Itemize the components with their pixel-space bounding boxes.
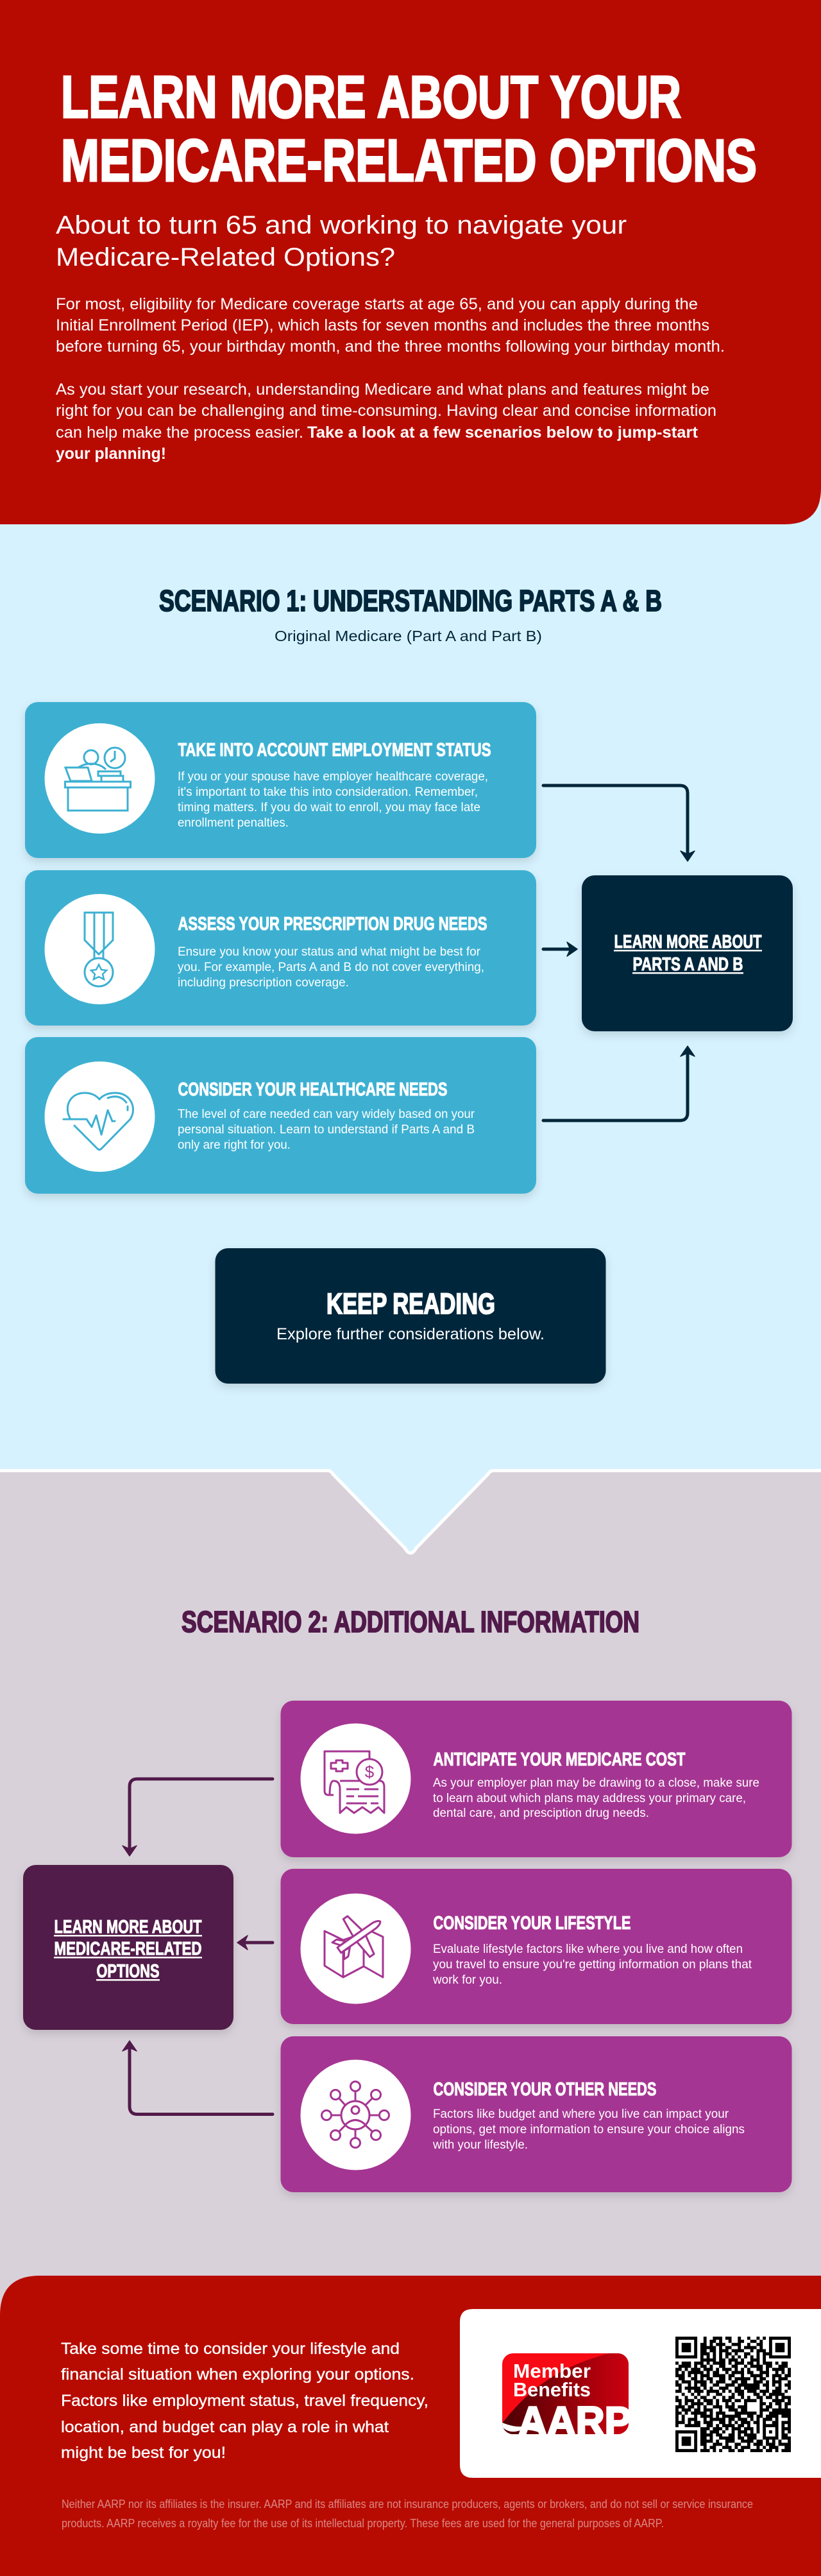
- card text: with your lifestyle.: [432, 2138, 528, 2152]
- intro paragraph 2: As you start your research, understanding Medicare and what plans and features might be: [56, 381, 709, 399]
- card text: personal situation. Learn to understand if Parts A and B: [178, 1122, 475, 1137]
- intro paragraph 1: Initial Enrollment Period (IEP), which lasts for seven months and includes the three months: [56, 316, 709, 334]
- callout: learn more about parts A and B: LEARN MORE ABOUT: [614, 932, 762, 952]
- card title: CONSIDER YOUR OTHER NEEDS: [434, 2079, 657, 2100]
- card: employment status: [25, 702, 536, 858]
- card text: Factors like budget and where you live can impact your: [433, 2107, 729, 2121]
- card text: Ensure you know your status and what might be best for: [178, 945, 480, 959]
- subtitle: About to turn 65 and working to navigate your: [56, 211, 627, 239]
- intro paragraph 2: can help make the process easier.: [56, 424, 303, 442]
- disclaimer: [62, 2497, 753, 2530]
- callout: learn more about medicare-related options: [23, 1865, 233, 2030]
- logo: AARP member benefits: [502, 2353, 629, 2434]
- card text: [178, 945, 484, 990]
- scenario 1 heading: SCENARIO 1: UNDERSTANDING PARTS A & B: [159, 584, 662, 617]
- callout: keep reading: KEEP READING: [326, 1287, 495, 1320]
- icon: map and plane: [325, 1903, 393, 1977]
- callout: learn more about parts A and B: [582, 875, 793, 1031]
- panel: scenario 1: [25, 584, 793, 1384]
- icon: heart: [63, 1093, 133, 1150]
- callout: keep reading: Explore further considerations below.: [276, 1325, 545, 1343]
- intro paragraph 1: For most, eligibility for Medicare coverage starts at age 65, and you can apply during the: [56, 295, 698, 313]
- card: healthcare needs: [25, 1037, 536, 1194]
- icon: medical bill: $: [365, 1762, 375, 1782]
- logo: AARP member benefits: Benefits: [513, 2378, 591, 2401]
- QR code: [675, 2337, 791, 2452]
- card title: CONSIDER YOUR HEALTHCARE NEEDS: [178, 1079, 448, 1100]
- card text: As your employer plan may be drawing to a close, make sure: [433, 1776, 759, 1790]
- card text: [178, 1107, 475, 1152]
- arrow: cost to options box: [123, 1779, 273, 1856]
- card title: ASSESS YOUR PRESCRIPTION DRUG NEEDS: [178, 914, 487, 934]
- panel: scenario 2: [0, 1471, 821, 2323]
- card text: [178, 769, 488, 830]
- card: other needs: [281, 2036, 791, 2192]
- intro paragraph 2: your planning!: [56, 445, 166, 463]
- scenario 1 subheading: Original Medicare (Part A and Part B): [275, 628, 542, 644]
- footer background: [0, 2276, 821, 2576]
- intro paragraph 1: [56, 295, 725, 356]
- arrow: prescription to parts box: [543, 942, 577, 956]
- intro paragraph 2: [56, 381, 716, 463]
- card text: The level of care needed can vary widely based on your: [178, 1107, 475, 1121]
- arrow: healthcare to parts box: [543, 1046, 695, 1121]
- closing text: financial situation when exploring your options.: [61, 2366, 414, 2383]
- card text: timing matters. If you do wait to enroll, you may face late: [178, 800, 480, 814]
- panel: footer: [0, 2276, 821, 2576]
- intro paragraph 2: right for you can be challenging and time-consuming. Having clear and concise information: [56, 402, 716, 420]
- card: medicare cost: [281, 1701, 791, 1857]
- arrow: other needs to options box: [123, 2041, 273, 2114]
- card text: [432, 2107, 745, 2152]
- title: [61, 64, 757, 194]
- panel: header: [0, 0, 821, 524]
- card text: options, get more information to ensure your choice aligns: [433, 2122, 745, 2136]
- intro paragraph 2: Take a look at a few scenarios below to jump-start: [307, 424, 698, 442]
- scenario 2 background with notch: [0, 1471, 821, 2323]
- header background: [0, 0, 821, 524]
- card text: [432, 1942, 752, 1987]
- card text: you. For example, Parts A and B do not cover everything,: [178, 960, 484, 974]
- card text: to learn about which plans may address your primary care,: [433, 1791, 746, 1805]
- card text: work for you.: [432, 1973, 502, 1987]
- subtitle: [56, 211, 627, 271]
- card title: CONSIDER YOUR LIFESTYLE: [434, 1913, 631, 1934]
- callout: keep reading: [216, 1248, 605, 1384]
- icon: network: [322, 2082, 389, 2147]
- section background: scenario 1: [0, 501, 821, 1566]
- card text: [433, 1776, 759, 1820]
- arrow: lifestyle to options box: [237, 1936, 273, 1950]
- closing text: [61, 2340, 428, 2462]
- callout: learn more about medicare-related options: MEDICARE-RELATED: [54, 1939, 201, 1959]
- logo: AARP member benefits: AARP: [518, 2398, 631, 2444]
- card: lifestyle: [281, 1869, 791, 2024]
- white logo panel: [460, 2309, 821, 2478]
- card text: Evaluate lifestyle factors like where you live and how often: [433, 1942, 743, 1956]
- card text: dental care, and presciption drug needs.: [433, 1806, 649, 1820]
- scenario 2 heading: SCENARIO 2: ADDITIONAL INFORMATION: [182, 1605, 639, 1638]
- icon: person at desk: [65, 748, 131, 811]
- card title: ANTICIPATE YOUR MEDICARE COST: [434, 1749, 686, 1770]
- icon: medical bill: [325, 1751, 384, 1813]
- intro paragraph 1: before turning 65, your birthday month, and the three months following your birthday month.: [56, 338, 725, 356]
- subtitle: Medicare-Related Options?: [56, 243, 395, 271]
- card text: If you or your spouse have employer healthcare coverage,: [178, 769, 488, 784]
- callout: learn more about medicare-related options: OPTIONS: [96, 1961, 159, 1982]
- card text: it's important to take this into consideration. Remember,: [178, 785, 478, 799]
- closing text: Factors like employment status, travel frequency,: [61, 2392, 428, 2410]
- closing text: Take some time to consider your lifestyle and: [61, 2340, 400, 2358]
- icon: medal: [85, 913, 113, 986]
- logo: AARP member benefits: Member: [513, 2360, 591, 2382]
- callout: learn more about parts A and B: PARTS A AND B: [632, 954, 743, 975]
- card text: you travel to ensure you're getting information on plans that: [433, 1957, 752, 1971]
- card: prescription drug needs: [25, 870, 536, 1026]
- card text: including prescription coverage.: [178, 975, 349, 990]
- card text: only are right for you.: [178, 1138, 291, 1152]
- disclaimer: products. AARP receives a royalty fee for the use of its intellectual property. These fees are used for the general purposes of AARP.: [62, 2516, 664, 2530]
- arrow: employment to parts box: [543, 786, 695, 861]
- callout: learn more about medicare-related options: LEARN MORE ABOUT: [54, 1917, 202, 1937]
- card text: enrollment penalties.: [178, 816, 289, 830]
- card title: TAKE INTO ACCOUNT EMPLOYMENT STATUS: [178, 740, 491, 760]
- closing text: might be best for you!: [61, 2444, 226, 2462]
- closing text: location, and budget can play a role in what: [61, 2418, 389, 2436]
